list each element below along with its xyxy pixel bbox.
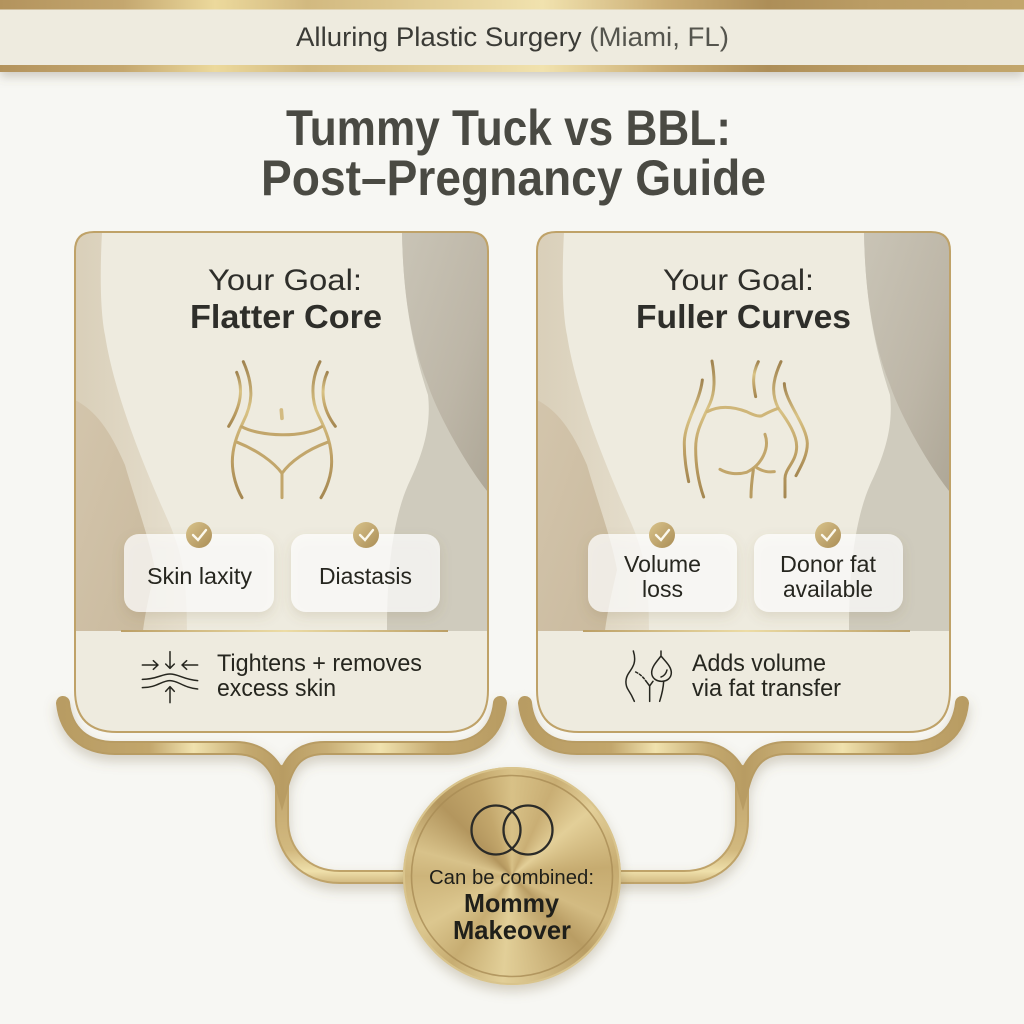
chip: diastasis: Diastasis xyxy=(319,563,412,589)
header band xyxy=(0,0,1024,72)
icon: interlocking rings xyxy=(472,806,552,854)
medallion text: Makeover xyxy=(453,915,571,945)
benefit text xyxy=(692,650,841,702)
chip: skin laxity: Skin laxity xyxy=(147,563,252,589)
benefit text: via fat transfer xyxy=(692,675,841,702)
benefit text: Tightens + removes xyxy=(217,650,422,677)
panel: flatter core xyxy=(75,232,488,732)
title: Post–Pregnancy Guide xyxy=(261,150,766,206)
heading: Fuller Curves xyxy=(636,298,851,335)
medallion: mommy makeover xyxy=(403,767,621,985)
chip: volume loss xyxy=(588,522,737,612)
heading xyxy=(636,264,851,335)
chip: donor fat available: available xyxy=(783,576,873,602)
title: Tummy Tuck vs BBL: xyxy=(286,100,731,156)
medallion text: Can be combined: xyxy=(429,867,594,889)
heading xyxy=(190,264,382,335)
clinic name: Alluring Plastic Surgery (Miami, FL) xyxy=(296,22,729,52)
icon: waist outline xyxy=(229,362,335,498)
benefit text: excess skin xyxy=(217,675,336,702)
chip: diastasis xyxy=(291,522,440,612)
benefit text xyxy=(217,650,422,702)
heading: Flatter Core xyxy=(190,298,382,335)
icon: hips outline xyxy=(684,361,807,497)
icon: fat transfer xyxy=(626,651,671,701)
heading: Your Goal: xyxy=(208,264,362,297)
right connector bracket xyxy=(525,703,962,877)
chip: donor fat available xyxy=(754,522,903,612)
icon: tightening arrows xyxy=(142,652,198,703)
left connector bracket xyxy=(63,703,500,877)
title xyxy=(261,100,766,206)
chip: volume loss: loss xyxy=(642,576,683,602)
medallion text: Mommy xyxy=(464,888,560,918)
chip: skin laxity xyxy=(124,522,274,612)
medallion text xyxy=(429,867,594,945)
chip: volume loss: Volume xyxy=(624,551,701,577)
panel: fuller curves xyxy=(537,232,950,732)
chip: donor fat available: Donor fat xyxy=(780,551,877,577)
heading: Your Goal: xyxy=(663,264,814,297)
benefit text: Adds volume xyxy=(692,650,826,677)
